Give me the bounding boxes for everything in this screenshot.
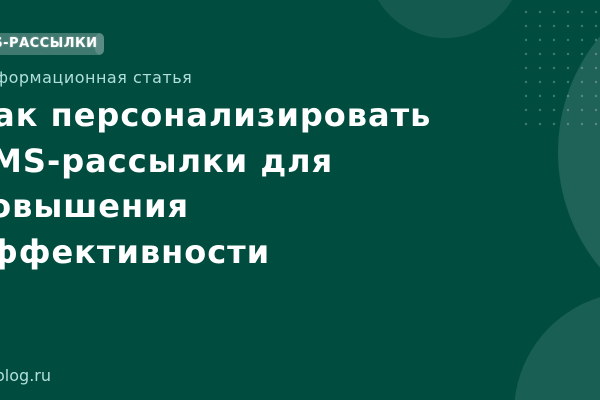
tag badge <box>0 33 104 55</box>
